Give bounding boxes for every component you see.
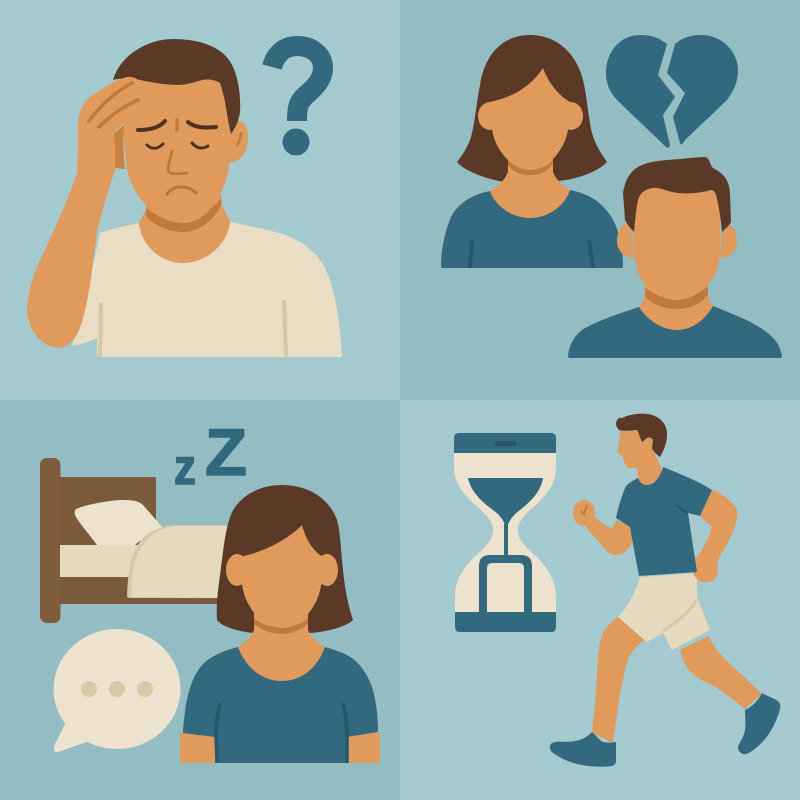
facial features (138, 120, 216, 194)
fist (573, 500, 595, 526)
icon: broken heart (606, 35, 738, 148)
face (240, 525, 323, 628)
shirt seams (100, 300, 286, 357)
finger lines (89, 83, 138, 127)
headboard (60, 477, 156, 548)
panel: relationship breakup (400, 0, 800, 400)
face (634, 185, 720, 300)
hourglass body (454, 450, 556, 614)
icon: hourglass with phone frame (454, 433, 556, 632)
neck and head (617, 431, 662, 485)
back leg (592, 617, 644, 743)
icon: question mark (272, 46, 323, 156)
icon: sleeping letters: Z (205, 415, 247, 489)
neck (238, 610, 325, 681)
t-shirt (72, 222, 342, 357)
face (123, 70, 232, 223)
front arm (586, 517, 633, 555)
hand shadow (112, 125, 125, 169)
bed post (40, 458, 60, 623)
bed base (60, 575, 230, 604)
back arm (693, 490, 737, 582)
neck (139, 195, 230, 263)
bottom bar (455, 612, 556, 632)
pillow (75, 500, 163, 545)
shirt seams (216, 703, 347, 763)
bed (40, 458, 230, 623)
ears (478, 102, 502, 130)
face (490, 68, 570, 170)
shirt seams (470, 240, 593, 268)
neck shadow (146, 198, 221, 232)
icon: sleeping letters (174, 415, 247, 495)
panel: time and exercise (400, 400, 800, 800)
icon: speech bubble (54, 629, 180, 752)
top bar (454, 433, 556, 453)
shorts (618, 573, 710, 650)
shirt (568, 306, 782, 358)
back shoe (550, 732, 616, 767)
shirt (616, 467, 712, 576)
panel: sleep and talking (0, 400, 400, 800)
phone frame (479, 555, 532, 613)
hair (457, 35, 607, 182)
man (568, 157, 782, 358)
woman (180, 485, 380, 763)
icon: sleeping letters: z (174, 439, 196, 495)
sand (468, 478, 543, 530)
arm and hand (27, 77, 143, 348)
neck (639, 275, 713, 330)
front shoe (738, 693, 780, 754)
blanket (127, 525, 228, 598)
shirt (441, 190, 623, 268)
woman (441, 35, 623, 268)
front leg (680, 636, 762, 709)
neck (490, 150, 570, 218)
hair (217, 485, 353, 633)
mattress (60, 545, 145, 577)
hair (616, 414, 667, 457)
hair (113, 39, 240, 134)
ears (617, 223, 634, 258)
runner (550, 414, 780, 767)
ear (230, 121, 248, 162)
ears (226, 554, 248, 586)
arms (180, 733, 220, 763)
shirt (183, 647, 378, 763)
hair (623, 157, 731, 232)
man with hand on forehead (27, 39, 342, 357)
panel: headache and confusion (0, 0, 400, 400)
